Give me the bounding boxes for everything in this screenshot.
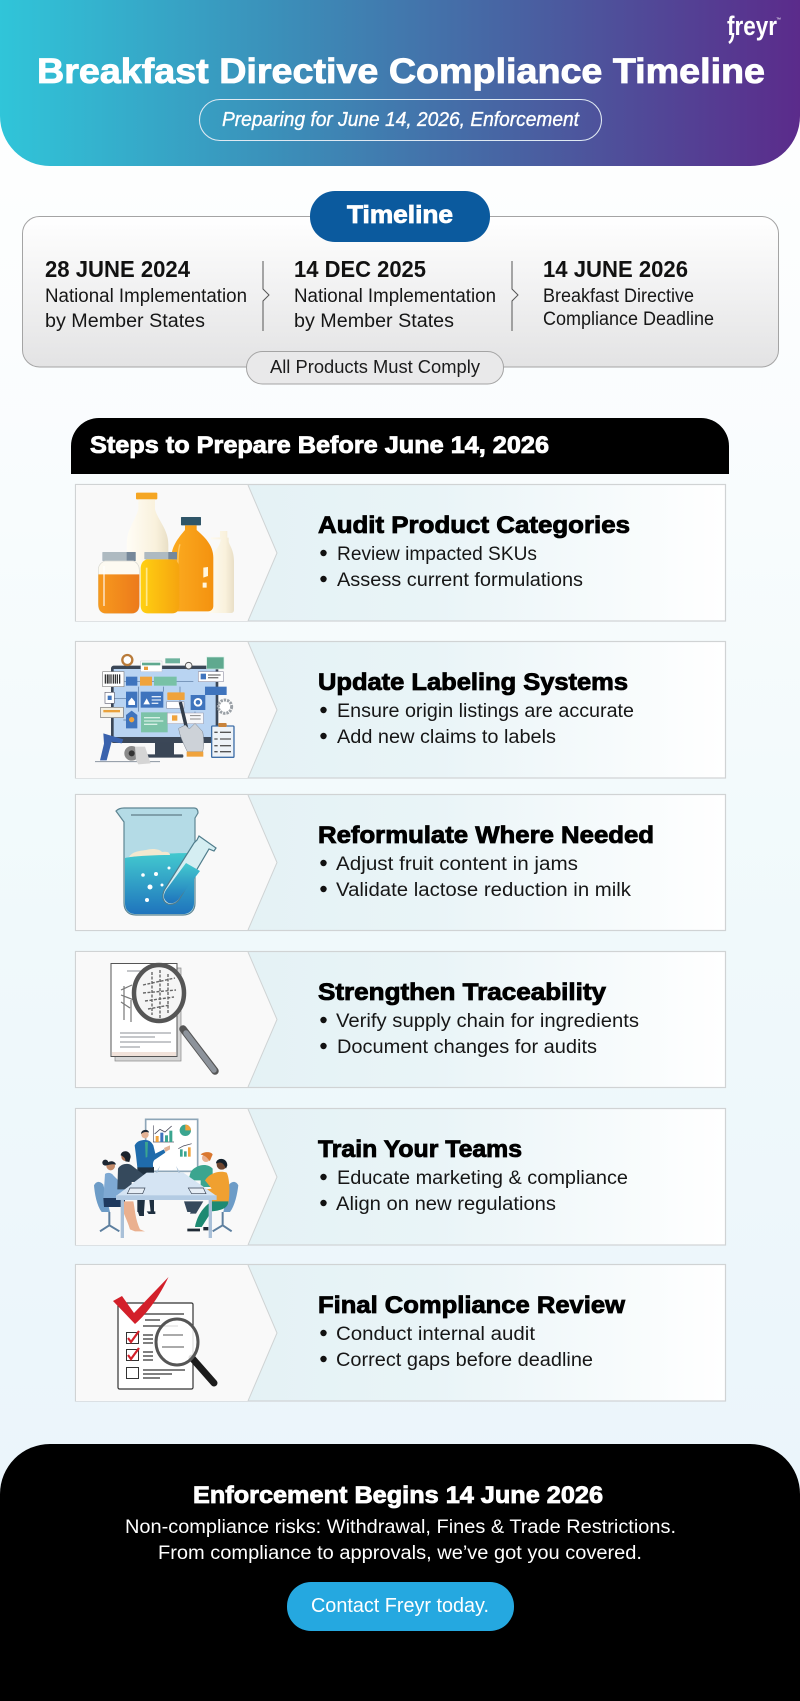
step 3 text: Validate lactose reduction in milk — [336, 880, 632, 901]
step 1 text: Audit Product Categories — [318, 512, 630, 539]
header banner — [0, 0, 800, 166]
logo: freyr: ™ — [776, 17, 781, 23]
panel: step 4 traceability — [76, 952, 726, 1088]
footer text: From compliance to approvals, we’ve got you covered. — [158, 1543, 642, 1564]
step 4 text — [318, 979, 639, 1058]
milestone: 14 Dec 2025: by Member States — [294, 311, 454, 332]
arrow divider 2 — [512, 261, 518, 331]
step 2 text: Ensure origin listings are accurate — [337, 701, 634, 722]
footer text: Non-compliance risks: Withdrawal, Fines & Trade Restrictions. — [125, 1517, 676, 1538]
contact button: Contact Freyr today. — [311, 1595, 489, 1617]
icon: bottles and jars — [98, 493, 234, 613]
step 4 text: Verify supply chain for ingredients — [336, 1011, 639, 1032]
milestone: 14 Dec 2025: National Implementation — [294, 286, 496, 307]
icon: team meeting — [94, 1119, 238, 1238]
icon: document and magnifier — [111, 964, 215, 1071]
timeline heading pill — [310, 191, 490, 242]
step 3 text: Adjust fruit content in jams — [336, 854, 578, 875]
panel: step 1 audit — [76, 484, 726, 621]
panel: timeline — [22, 191, 778, 384]
step 1 text — [318, 512, 630, 591]
panel: step 3 reformulate — [76, 794, 726, 930]
step 5 text — [318, 1136, 628, 1215]
timeline heading pill: Timeline — [347, 201, 453, 229]
step 2 text: Update Labeling Systems — [318, 669, 628, 696]
step 6 text — [318, 1292, 625, 1371]
icon: checklist and magnifier — [113, 1277, 214, 1389]
milestone: 28 June 2024: by Member States — [45, 311, 205, 332]
step 5 text: Educate marketing & compliance — [337, 1168, 628, 1189]
step 3 text — [318, 822, 654, 901]
step 4 text: Strengthen Traceability — [318, 979, 607, 1006]
step 5 text: Train Your Teams — [318, 1136, 522, 1163]
panel: step 2 labeling — [76, 642, 726, 778]
step 4 text: Document changes for audits — [337, 1037, 597, 1058]
milestone: 28 June 2024: National Implementation — [45, 286, 247, 307]
footer panel — [0, 1444, 800, 1701]
step 1 text: Review impacted SKUs — [337, 544, 537, 565]
note pill: All Products Must Comply — [270, 356, 481, 377]
icon: labeling computer — [95, 655, 234, 764]
step 3 text: Reformulate Where Needed — [318, 822, 654, 849]
step 2 text — [318, 669, 634, 748]
subtitle pill — [200, 100, 602, 140]
title: Breakfast Directive Compliance Timeline — [37, 52, 765, 91]
arrow divider 1 — [263, 261, 269, 331]
milestone: 14 June 2026: 14 JUNE 2026 — [543, 256, 688, 282]
icon: beaker and test tube — [116, 808, 216, 915]
milestone: 14 June 2026 — [543, 256, 714, 330]
steps heading — [71, 418, 729, 474]
panel: step 6 final review — [76, 1264, 726, 1401]
milestone: 14 Dec 2025 — [294, 256, 496, 332]
step 6 text: Conduct internal audit — [336, 1324, 536, 1345]
footer text — [125, 1517, 676, 1564]
milestone: 14 Dec 2025: 14 DEC 2025 — [294, 256, 426, 282]
milestone: 14 June 2026: Compliance Deadline — [543, 309, 714, 330]
contact button — [287, 1582, 514, 1631]
chairs — [94, 1182, 110, 1212]
step 6 text: Correct gaps before deadline — [336, 1350, 593, 1371]
subtitle pill: Preparing for June 14, 2026, Enforcement — [222, 108, 580, 131]
milestone: 28 June 2024: 28 JUNE 2024 — [45, 256, 190, 282]
step 2 text: Add new claims to labels — [337, 727, 556, 748]
panel: step 5 train — [76, 1108, 726, 1245]
step 6 text: Final Compliance Review — [318, 1292, 625, 1319]
milestone: 14 June 2026: Breakfast Directive — [543, 286, 694, 307]
logo: freyr: freyr — [727, 11, 777, 41]
footer heading: Enforcement Begins 14 June 2026 — [193, 1482, 603, 1509]
note pill — [246, 352, 504, 384]
milestone: 28 June 2024 — [45, 256, 247, 332]
steps heading: Steps to Prepare Before June 14, 2026 — [90, 432, 549, 459]
step 5 text: Align on new regulations — [336, 1194, 556, 1215]
step 1 text: Assess current formulations — [337, 570, 583, 591]
